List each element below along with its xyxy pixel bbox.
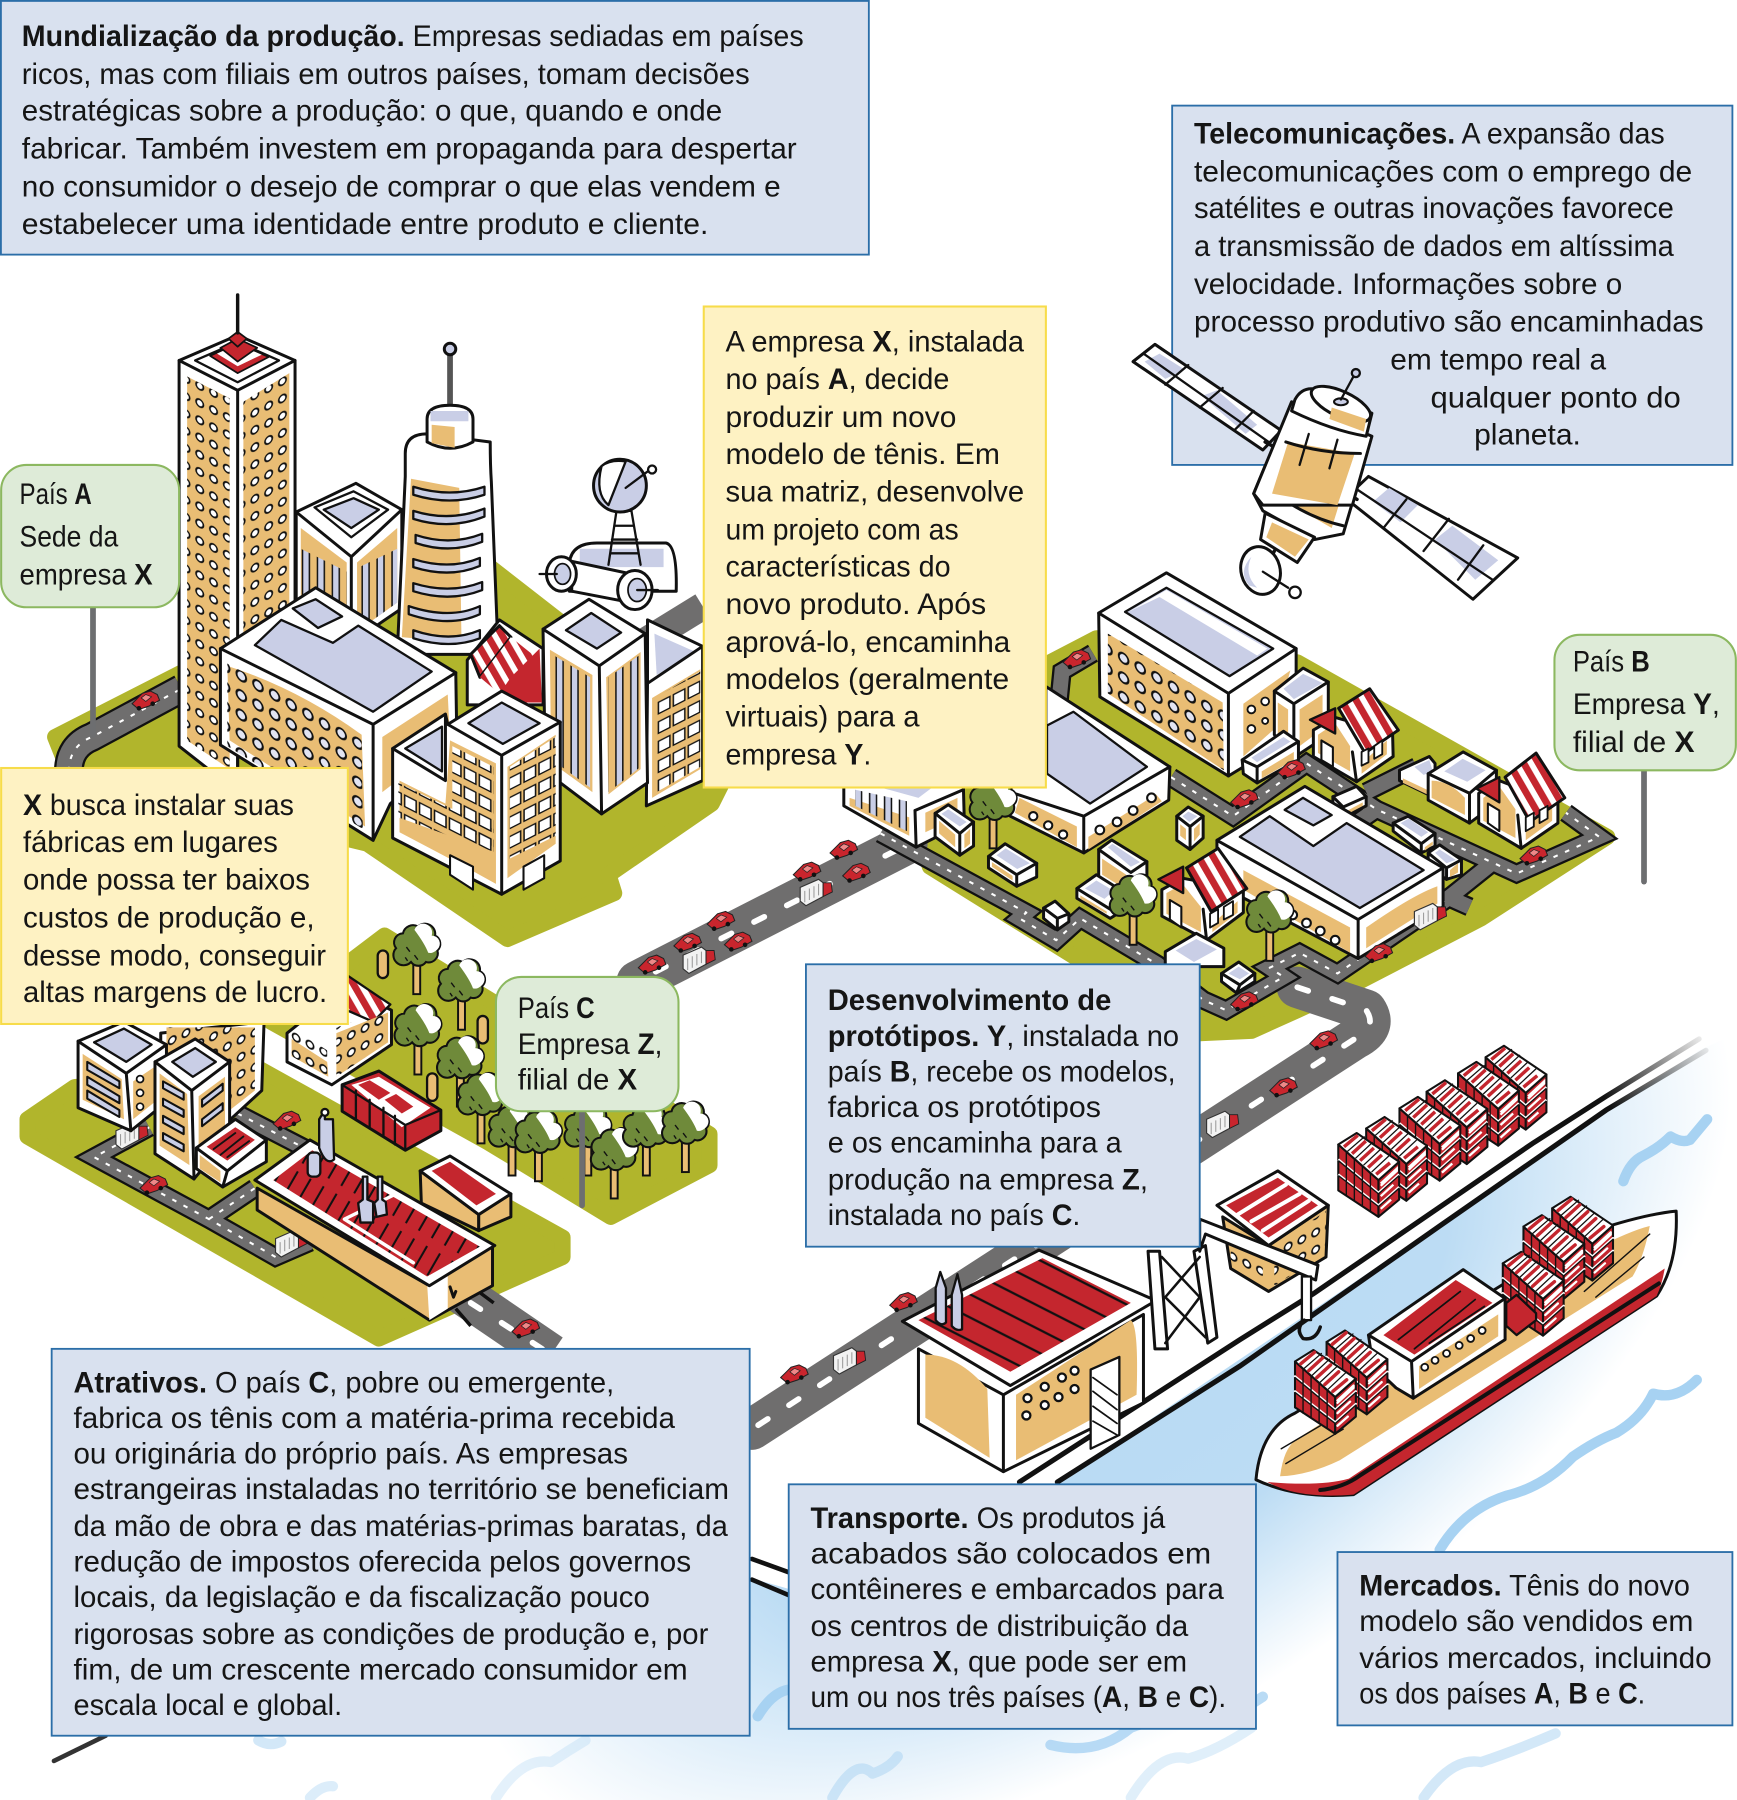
satellite <box>1133 344 1518 599</box>
panel: mundialização da produção: ricos, mas com filiais em outros países, tomam decisões <box>22 58 750 91</box>
building: right block A <box>646 620 703 806</box>
panel: mundialização da produção: fabricar. Também investem em propaganda para despertar <box>22 132 797 165</box>
house upper B <box>1310 689 1398 782</box>
label: País B: País B <box>1573 646 1650 679</box>
panel: desenvolvimento de protótipos: e os encaminha para a <box>828 1127 1122 1160</box>
cargo ship <box>1256 1197 1676 1496</box>
panel: telecomunicações (behind satellite): satélites e outras inovações favorece <box>1194 192 1674 225</box>
label: País C <box>496 977 678 1111</box>
callout: X busca: desse modo, conseguir <box>23 939 326 972</box>
annex B <box>1274 668 1328 758</box>
panel: mercados: vários mercados, incluindo <box>1359 1642 1712 1675</box>
callout: empresa X: virtuais) para a <box>726 701 920 734</box>
trees and vehicles B <box>970 650 1548 1011</box>
country C ground: factory <box>28 1068 563 1339</box>
country C ground: trees <box>271 936 709 1217</box>
panel: transporte: contêineres e embarcados para <box>811 1573 1224 1606</box>
panel: transporte <box>789 1484 1256 1729</box>
callout: empresa X: um projeto com as <box>726 514 959 547</box>
waves <box>258 1119 1707 1798</box>
label: País A: Sede da <box>20 520 119 553</box>
panel: desenvolvimento de protótipos: país B, recebe os modelos, <box>828 1055 1176 1088</box>
crane with container building <box>1148 1171 1328 1349</box>
road from B to port <box>752 987 1370 1429</box>
panel: telecomunicações (behind satellite): processo produtivo são encaminhadas <box>1194 306 1704 339</box>
small blocks B <box>988 807 1255 993</box>
solar panel left <box>1133 344 1281 450</box>
building: L-shaped front A <box>393 691 560 894</box>
antenna complex A <box>540 459 676 610</box>
callout: empresa X: sua matriz, desenvolve <box>726 476 1024 509</box>
panel: mundialização da produção <box>1 1 869 255</box>
factory C <box>255 1109 495 1320</box>
vehicles on roads <box>116 691 1337 1384</box>
panel: mundialização da produção: estratégicas sobre a produção: o que, quando e onde <box>22 95 722 128</box>
callout: X busca: X busca instalar suas <box>23 789 294 822</box>
building: lower large B <box>1217 786 1443 959</box>
building: big front A <box>220 588 457 840</box>
pole País B <box>1642 770 1647 882</box>
panel: desenvolvimento de protótipos: produção na empresa Z, <box>828 1163 1148 1196</box>
panel: transporte: Transporte. Os produtos já <box>811 1502 1166 1535</box>
callout: X busca: altas margens de lucro. <box>23 976 327 1009</box>
satellite body <box>1235 369 1375 599</box>
panel: telecomunicações (behind satellite): qualquer ponto do <box>1430 382 1681 415</box>
box beside arches B <box>935 805 974 855</box>
callout: empresa X: produzir um novo <box>726 401 956 434</box>
country B buildings <box>844 573 1565 1011</box>
label: País C: País C <box>518 992 595 1025</box>
panel: mercados: Mercados. Tênis do novo <box>1359 1570 1690 1603</box>
road leaving factory <box>453 1286 551 1355</box>
pole País A <box>90 607 95 735</box>
road country A <box>69 689 181 771</box>
panel: atrativos: estrangeiras instaladas no território se beneficiam <box>73 1473 729 1506</box>
main road B to A and C <box>637 844 907 982</box>
panel: atrativos: fabrica os tênis com a matéria-prima recebida <box>73 1402 675 1435</box>
callout: empresa X: características do <box>726 550 951 583</box>
callout: empresa X: empresa Y. <box>726 739 871 772</box>
small annex B <box>1242 731 1298 783</box>
building: tall tower A <box>179 295 295 792</box>
country A ground <box>55 568 735 939</box>
callout: empresa X: aprová-lo, encaminha <box>726 626 1011 659</box>
label: País A: empresa X <box>20 558 153 591</box>
building: middle B <box>982 686 1170 853</box>
panel: atrativos: Atrativos. O país C, pobre ou emergente, <box>73 1366 614 1399</box>
panel: telecomunicações (behind satellite): velocidade. Informações sobre o <box>1194 268 1622 301</box>
panel: mundialização da produção: Mundialização da produção. Empresas sediadas em países <box>22 20 804 53</box>
panel: desenvolvimento de protótipos: Desenvolvimento de <box>828 984 1111 1017</box>
panel: atrativos: locais, da legislação e da fiscalização pouco <box>73 1581 650 1614</box>
panel: transporte: empresa X, que pode ser em <box>811 1645 1187 1678</box>
panel: atrativos: rigorosas sobre as condições de produção e, por <box>73 1618 708 1651</box>
road country A right stub <box>643 606 703 643</box>
panel: transporte: os centros de distribuição da <box>811 1610 1189 1643</box>
port warehouse <box>902 1250 1156 1472</box>
panel: mundialização da produção: no consumidor o desejo de comprar o que elas vendem e <box>22 170 781 203</box>
label: País B: filial de X <box>1573 726 1695 759</box>
panel: atrativos: redução de impostos oferecida pelos governos <box>73 1546 691 1579</box>
trees country C <box>378 924 709 1198</box>
building: dotted back C <box>161 1022 264 1131</box>
small boxes by right road B <box>1393 816 1461 879</box>
panel: telecomunicações (behind satellite): telecomunicações com o emprego de <box>1194 155 1692 188</box>
building: square arches A <box>296 483 402 643</box>
panel: telecomunicações (behind satellite): em tempo real a <box>1390 344 1607 377</box>
building: small red roof C <box>196 1119 266 1187</box>
panel: mundialização da produção: estabelecer uma identidade entre produto e cliente. <box>22 208 708 241</box>
panel: desenvolvimento de protótipos: instalada no país C. <box>828 1199 1080 1232</box>
callout: empresa X <box>704 307 1046 788</box>
panel: telecomunicações (behind satellite): a transmissão de dados em altíssima <box>1194 230 1674 263</box>
building: tall block C <box>155 1039 230 1179</box>
label: País C: filial de X <box>518 1063 637 1096</box>
building: red striped A <box>467 620 543 705</box>
panel: atrativos: escala local e global. <box>73 1689 342 1722</box>
panel: desenvolvimento de protótipos: protótipos. Y, instalada no <box>828 1020 1179 1053</box>
small warehouse C <box>420 1156 511 1231</box>
building: upper large B <box>1099 573 1296 776</box>
callout: X busca: custos de produção e, <box>23 902 315 935</box>
label: País B <box>1554 635 1736 770</box>
shoreline <box>54 1039 1706 1761</box>
satellite overlay on panel <box>1133 344 1375 505</box>
solar panel right <box>1346 476 1518 599</box>
building: lined block A <box>543 599 648 814</box>
road network country B <box>881 653 1599 1010</box>
building: dotted with stripes C <box>287 973 391 1085</box>
panel: mercados <box>1337 1552 1732 1725</box>
callout: empresa X: novo produto. Após <box>726 588 986 621</box>
building: left arches B <box>844 781 964 847</box>
panel: mercados: os dos países A, B e C. <box>1359 1678 1645 1711</box>
building: left block C <box>78 1022 166 1131</box>
panel: atrativos: fim, de um crescente mercado consumidor em <box>73 1653 688 1686</box>
pole País C <box>580 1111 585 1205</box>
panel: atrativos <box>52 1349 750 1736</box>
callout: X busca <box>1 768 348 1024</box>
callout: empresa X: no país A, decide <box>726 363 949 396</box>
country C buildings <box>78 973 511 1320</box>
callout: empresa X: modelos (geralmente <box>726 663 1009 696</box>
red containers C <box>342 1071 441 1150</box>
house lower B <box>1158 848 1247 940</box>
callout: X busca: fábricas em lugares <box>23 826 278 859</box>
panel: telecomunicações (behind satellite): planeta. <box>1474 418 1581 451</box>
panel: transporte: acabados são colocados em <box>811 1538 1211 1571</box>
water background <box>0 1033 1737 1800</box>
panel: desenvolvimento de protótipos <box>806 964 1200 1247</box>
callout: empresa X: A empresa X, instalada <box>726 325 1024 358</box>
container stacks on the dock <box>1338 1046 1546 1217</box>
label: País C: Empresa Z, <box>518 1028 662 1061</box>
label: País A: País A <box>20 478 92 511</box>
panel: transporte: um ou nos três países (A, B e C). <box>811 1681 1226 1714</box>
label: País A <box>1 465 179 607</box>
house right B <box>1399 752 1565 848</box>
panel: atrativos: da mão de obra e das matérias-primas baratas, da <box>73 1510 728 1543</box>
callout: empresa X: modelo de tênis. Em <box>726 438 1000 471</box>
panel: mercados: modelo são vendidos em <box>1359 1605 1693 1638</box>
panel: desenvolvimento de protótipos: fabrica os protótipos <box>828 1091 1101 1124</box>
panel: telecomunicações (behind satellite): Telecomunicações. A expansão das <box>1194 117 1665 150</box>
box next to road B <box>1333 786 1366 817</box>
panel: atrativos: ou originária do próprio país. As empresas <box>73 1438 628 1471</box>
country B ground <box>907 638 1607 1033</box>
building: round tower A <box>397 343 498 654</box>
callout: X busca: onde possa ter baixos <box>23 864 310 897</box>
label: País B: Empresa Y, <box>1573 688 1720 721</box>
panel: telecomunicações (behind satellite) <box>1172 106 1732 465</box>
road network country C <box>94 1114 310 1257</box>
